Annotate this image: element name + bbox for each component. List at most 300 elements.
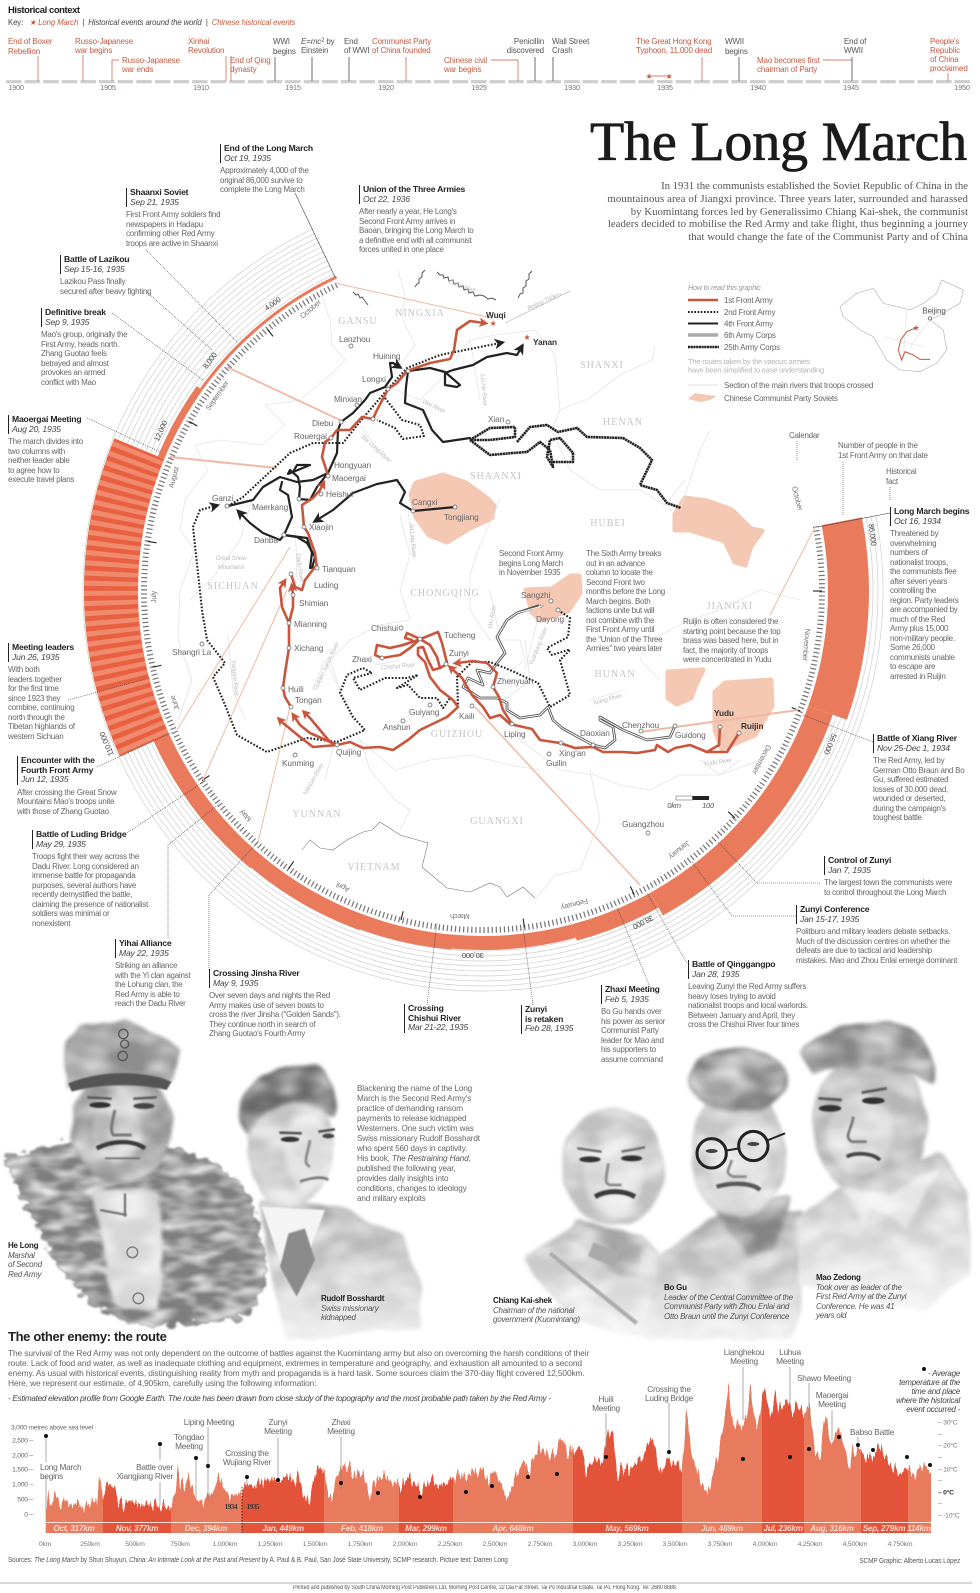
event: maoergai meeting: The march divides into	[8, 437, 83, 446]
event: crossing chishui river: Crossing	[408, 1003, 444, 1013]
city labels: Danba	[254, 535, 278, 545]
portrait: bo gu	[643, 1048, 803, 1338]
province labels: YUNNAN	[292, 809, 342, 820]
elevation chart: axes: 0 –	[24, 1512, 33, 1518]
event: meeting leaders: combine, continuing	[8, 703, 74, 712]
city labels: Heishui	[326, 489, 353, 499]
city labels: Tongan	[295, 695, 322, 705]
ring value labels: 12,000	[152, 419, 169, 443]
timeline: historical context ruler: begins	[273, 47, 296, 56]
city labels: Guiyang	[409, 707, 440, 717]
city labels: Yanan	[533, 337, 557, 347]
event: crossing jinsha river	[209, 968, 341, 1038]
event: battle of luding bridge: soldiers was minimal or	[32, 909, 109, 918]
elevation chart: event markers: Luding Bridge	[645, 1393, 694, 1403]
caption: he long: He Long	[8, 1241, 38, 1250]
elevation chart: axes: 2,000km	[393, 1541, 418, 1548]
event: end of the long march: complete the Long March	[220, 185, 305, 194]
city labels: Kaili	[459, 711, 474, 721]
event: battle of luding bridge: nonexistent	[32, 918, 70, 928]
timeline: historical context ruler: Republic	[930, 46, 960, 55]
event: long march begins: non-military people.	[890, 634, 955, 642]
elevation chart: axes: 3,000 metres above sea level	[11, 1424, 94, 1432]
portrait: rudolf bosshardt	[240, 1066, 420, 1340]
event: meeting leaders: leaders together	[8, 674, 62, 684]
elevation chart: axes: 1,500 –	[12, 1466, 33, 1474]
ring value labels: 110,000	[98, 731, 116, 757]
calendar day ticks: October	[298, 297, 323, 320]
ring chart: people in first front army	[84, 276, 869, 950]
caption: rudolf bosshardt: Swiss missionary	[321, 1304, 378, 1312]
event: shaanxi soviet	[126, 187, 220, 248]
elevation chart: event markers: Xiangjiang River	[117, 1471, 173, 1481]
event: encounter with the fourth front army	[17, 755, 117, 816]
event: control of zunyi: Jan 7, 1935	[828, 864, 871, 874]
river and mountain labels: Dadu River	[294, 553, 305, 584]
note: sixth army: First Front Army until	[586, 625, 654, 634]
timeline: historical context ruler: People's	[930, 37, 959, 46]
connector lines: events to ring	[68, 193, 890, 1005]
elevation chart: monthly areas: Apr, 648km	[491, 1524, 534, 1533]
province labels: HUBEI	[590, 518, 626, 529]
elevation chart: event markers: Battle over	[136, 1462, 173, 1472]
elevation chart: monthly areas: Sep, 279km	[863, 1524, 905, 1533]
calendar day ticks: August	[166, 466, 181, 489]
timeline: historical context ruler: proclaimed	[930, 64, 968, 73]
event: definitive break: Zhang Guotao feels	[41, 349, 107, 358]
timeline: historical context ruler: of China	[930, 55, 959, 64]
text: the other enemy intro: The survival of the Red Army was not only dependent on the outcome of battles against the Kuomintang army but also on overcoming the harsh conditions of their	[8, 1348, 589, 1358]
elevation chart: monthly areas: Jul, 236km	[763, 1524, 803, 1533]
city labels: Guidong	[675, 730, 706, 740]
timeline: historical context ruler: 1915	[285, 83, 301, 92]
event: battle of qinggangpo: Leaving Zunyi the Red Army suffers	[688, 982, 806, 991]
caption: mao zedong: Mao Zedong	[816, 1273, 861, 1282]
elevation chart: monthly areas: 114km	[907, 1524, 931, 1533]
event: battle of luding bridge: Dadu River. Long considered an	[32, 862, 139, 870]
event: long march begins: Oct 16, 1934	[894, 516, 941, 526]
city labels: Maoergai	[332, 473, 366, 483]
note: sixth army: The Sixth Army breaks	[586, 549, 661, 558]
city labels: Guilin	[546, 758, 567, 768]
timeline: historical context ruler: Wall Street	[552, 37, 590, 46]
event: encounter with the fourth front army: Encounter with the	[21, 755, 95, 765]
note: historical fact: fact	[886, 476, 898, 486]
city labels: Sangzhi	[521, 590, 551, 600]
city labels: Chenzhou	[622, 720, 660, 730]
elevation chart: axes: 750km	[170, 1541, 190, 1548]
timeline: historical context ruler: war ends	[121, 65, 153, 74]
elevation chart: monthly areas: Nov, 377km	[116, 1524, 158, 1533]
event: control of zunyi: Control of Zunyi	[828, 855, 891, 865]
elevation chart: event markers: event occurred -	[906, 1405, 961, 1414]
event: zunyi conference: Zunyi Conference	[800, 904, 869, 914]
intro text: leaders decided to mobilise the Red Army and take flight, thus beginning a journey	[608, 218, 968, 230]
event: battle of qinggangpo: Between January and April, they	[688, 1010, 795, 1020]
event: maoergai meeting	[8, 414, 83, 484]
event: battle of luding bridge: recently demystified the battle,	[32, 890, 132, 899]
ring value labels: 8,000	[201, 351, 219, 370]
event: crossing chishui river: Mar 21-22, 1935	[408, 1022, 468, 1032]
note: sixth army: Armies” two years later	[586, 644, 662, 653]
legend: how to read this graphic: The routes taken by the various armies	[688, 357, 810, 366]
province labels: JIANGXI	[707, 601, 753, 612]
event: shaanxi soviet: Shaanxi Soviet	[130, 187, 188, 197]
event: definitive break: provokes an armed	[41, 368, 105, 377]
event: battle of lazikou: Lazikou Pass finally	[60, 277, 125, 286]
event: battle of luding bridge: claiming the presence of nationalist	[32, 900, 148, 908]
event: long march begins: nationalist troops,	[890, 558, 948, 566]
elevation chart: event markers: Shawo Meeting	[797, 1373, 852, 1383]
note: sixth army: factions unite but will	[586, 606, 654, 615]
event: battle of luding bridge	[32, 829, 148, 928]
city labels: Kunming	[282, 758, 315, 768]
intro text	[607, 180, 968, 243]
timeline: historical context ruler: Russo-Japanese	[122, 56, 181, 65]
province labels: HUNAN	[594, 669, 636, 680]
timeline: historical context ruler: End of	[844, 37, 867, 46]
elevation chart: axes: 4,750km	[888, 1541, 913, 1548]
timeline: historical context ruler: 1900	[8, 83, 24, 92]
timeline: historical context ruler: dynasty	[230, 65, 257, 74]
legend: how to read this graphic: 6th Army Corps	[724, 331, 776, 340]
river and mountain labels: Xiang River	[591, 692, 624, 707]
timeline: historical context ruler: chairman of Party	[757, 65, 817, 74]
elevation chart: event markers: Long March	[40, 1462, 82, 1472]
map borders and rivers	[178, 270, 800, 900]
event: battle of qinggangpo: Jan 28, 1935	[692, 968, 739, 978]
intro text: mountainous area of Jiangxi province. Three years later, surrounded and harassed	[607, 193, 968, 205]
event: long march begins: after seven years	[890, 576, 947, 586]
elevation chart: monthly areas: Oct, 317km	[53, 1524, 95, 1533]
river and mountain labels	[216, 279, 733, 796]
event: long march begins: are accompanied by	[890, 605, 958, 614]
event: zhaxi meeting: Feb 5, 1935	[605, 994, 649, 1004]
elevation chart: event markers: Wujiang River	[223, 1457, 272, 1467]
event: encounter with the fourth front army: with those of Zhang Guotao	[17, 806, 109, 816]
note: ruijin: Ruijin is often considered the	[683, 617, 778, 626]
event: crossing jinsha river: cross the river Jinsha ("Golden Sands").	[209, 1010, 341, 1019]
elevation chart: event markers: time and place	[911, 1387, 961, 1396]
caption: mao zedong	[816, 1273, 907, 1320]
city labels: Zunyi	[449, 648, 469, 658]
legend: how to read this graphic: How to read this graphic	[688, 283, 761, 292]
elevation chart: event markers: Crossing the	[647, 1384, 691, 1394]
elevation chart: monthly areas: May, 569km	[605, 1524, 649, 1533]
event: maoergai meeting: to agree how to	[8, 466, 59, 474]
event: crossing jinsha river: May 9, 1935	[213, 978, 258, 988]
event: zhaxi meeting: leader for Mao and	[601, 1036, 664, 1044]
timeline: historical context ruler: WWII	[725, 37, 744, 46]
city labels: Zhaxi	[352, 654, 372, 664]
elevation chart: axes: 2,500 –	[12, 1438, 33, 1444]
text: blackening the name: payments to release kidnapped	[357, 1114, 466, 1123]
caption: bo gu: Bo Gu	[664, 1283, 687, 1292]
text: the other enemy intro: Here, we represent our estimate, of 4,905km, carefully using the following information:	[8, 1378, 316, 1388]
event: meeting leaders: Tibetan highlands of	[8, 722, 75, 731]
province labels: GUIZHOU	[431, 729, 483, 740]
event: shaanxi soviet: confirming other Red Army	[126, 229, 214, 238]
city labels: ★	[490, 319, 497, 328]
city labels: Wuqi	[486, 310, 506, 320]
river and mountain labels: Great Wall	[448, 279, 476, 295]
ring value labels	[98, 295, 878, 960]
text: blackening the name: who spent 560 days in captivity.	[357, 1144, 467, 1153]
event: battle of lazikou: secured after heavy fighting	[60, 286, 151, 296]
elevation chart: axes: 2,250km	[438, 1541, 463, 1548]
city labels: Ganzi	[212, 493, 233, 503]
elevation chart: axes: –	[938, 1477, 942, 1484]
timeline: historical context ruler: 1935	[657, 83, 673, 92]
event: meeting leaders: north through the	[8, 712, 65, 722]
city labels: Xiaojin	[309, 522, 334, 532]
province labels: SHANXI	[580, 360, 624, 371]
city labels: Diebu	[312, 418, 334, 428]
route: 4th front army	[228, 348, 521, 568]
city labels: Cangxi	[412, 497, 437, 507]
timeline: historical context ruler: of China founded	[372, 46, 431, 55]
event: control of zunyi: The largest town the communists were	[824, 878, 952, 887]
river and mountain labels: Jia Ling River	[407, 521, 418, 559]
city labels: Chishui	[371, 623, 398, 633]
elevation chart: axes: 1,000 –	[12, 1482, 33, 1488]
event: battle of lazikou: Battle of Lazikou	[64, 254, 129, 264]
city labels: Hongyuan	[334, 460, 372, 470]
concentric people-scale rings	[83, 191, 883, 991]
event: meeting leaders: Meeting leaders	[12, 642, 74, 652]
event: long march begins: numbers of	[890, 548, 928, 557]
event: battle of xiang river: German Otto Braun and Bo	[873, 766, 964, 774]
elevation chart: event markers: begins	[40, 1471, 63, 1481]
elevation chart: event markers: Luhua	[779, 1347, 802, 1357]
river and mountain labels: Chishui River	[381, 661, 416, 671]
event: definitive break: Mao's group, originally the	[41, 330, 127, 339]
caption: mao zedong: First Red Army at the Zunyi	[816, 1292, 906, 1301]
text: blackening the name: His book, The Restraining Hand,	[357, 1154, 471, 1163]
elevation chart: event markers: Tongdao	[174, 1432, 205, 1442]
note: sixth army	[586, 549, 665, 653]
elevation chart: event markers: Meeting	[264, 1426, 293, 1436]
event: zunyi is retaken	[521, 1004, 574, 1034]
event: union of the three armies: Union of the Three Armies	[363, 184, 465, 194]
note: sixth army: the “Union of the Three	[586, 634, 662, 644]
event: battle of luding bridge: immense battle for propaganda	[32, 871, 135, 880]
city labels: Shangri La	[172, 647, 212, 657]
timeline: historical context ruler: ★	[646, 72, 653, 81]
note: ruijin: fact, the majority of troops	[683, 646, 768, 654]
timeline: historical context ruler: Penicillin	[514, 37, 544, 46]
elevation chart: axes: 1,000km	[213, 1541, 238, 1548]
intro text: that would change the fate of the Communist Party and of China	[688, 231, 968, 243]
city labels	[172, 310, 763, 829]
caption: bo gu	[664, 1283, 793, 1320]
event: zhaxi meeting: Bo Gu hands over	[601, 1007, 661, 1016]
city labels: Huili	[288, 684, 304, 694]
timeline: historical context ruler: 1920	[378, 83, 394, 92]
elevation chart: event markers: - Average	[928, 1369, 961, 1378]
elevation chart: axes: 250km	[80, 1541, 100, 1548]
elevation chart: axes: 3,750km	[708, 1541, 733, 1548]
note: sixth army: column to locate the	[586, 568, 653, 577]
timeline: historical context ruler: 1930	[564, 83, 580, 92]
city labels: Lanzhou	[339, 334, 371, 344]
locator map: china: ★	[912, 324, 920, 333]
portrait: he long	[5, 1022, 264, 1327]
note: historical fact: Historical	[886, 467, 916, 476]
note: number of people	[838, 441, 928, 460]
note: calendar: Calendar	[789, 431, 819, 440]
print line: Printed and published by South China Morning Post Publishers Ltd, Morning Post Centre, 22 Dai Fat Street, Tai Po Industrial Estate, Tai Po, Hong Kong. Tel: 2680 8888.	[293, 1585, 677, 1591]
event: zunyi is retaken: Feb 28, 1935	[525, 1023, 573, 1033]
note: ruijin: were concentrated in Yudu	[683, 655, 771, 664]
city labels: Mianning	[294, 619, 327, 629]
province labels: SICHUAN	[207, 581, 259, 592]
locator map: china	[840, 280, 963, 372]
elevation chart: event markers: Meeting	[776, 1356, 805, 1366]
event: yihai alliance: May 22, 1935	[119, 948, 169, 958]
elevation chart: event markers: Zhaxi	[331, 1417, 351, 1427]
elevation chart: axes: 4,000km	[753, 1541, 778, 1548]
caption: chiang kai-shek: Chiang Kai-shek	[493, 1296, 552, 1305]
note: sixth army: March begins. Both	[586, 596, 650, 606]
event: yihai alliance: with the Yi clan against	[115, 970, 190, 980]
city labels: Shimian	[299, 598, 329, 608]
timeline: historical context ruler: war begins	[443, 65, 481, 74]
locator map: china: Beijing	[922, 306, 946, 315]
city labels: Zhenyuan	[497, 676, 534, 686]
event: definitive break: Definitive break	[45, 307, 106, 317]
note: ruijin: brass was based here, but in	[683, 636, 778, 645]
timeline key: Key: ★ Long March | Historical events around the world | Chinese historical events	[8, 18, 295, 27]
text: blackening the name: practice of demanding ransom	[357, 1104, 463, 1113]
timeline: historical context ruler: 1905	[100, 83, 116, 92]
city labels: Maerkang	[252, 502, 289, 512]
timeline: historical context ruler: ★	[666, 72, 673, 81]
intro text: by Kuomintang forces led by Generalissimo Chiang Kai-shek, the communist	[631, 206, 968, 218]
timeline: historical context ruler	[6, 37, 970, 92]
event: yihai alliance: Yihai Alliance	[119, 938, 171, 948]
timeline: historical context ruler: WWI	[273, 37, 290, 46]
province labels: NINGXIA	[395, 308, 445, 319]
caption: bo gu: Otto Braun until the Zunyi Conference	[664, 1312, 789, 1320]
event: zunyi conference	[796, 904, 958, 964]
event: long march begins: much of the Red	[890, 614, 945, 624]
event: crossing jinsha river: Crossing Jinsha River	[213, 968, 300, 978]
note: sixth army: Second Front two	[586, 578, 645, 586]
elevation chart: event markers: Zunyi	[268, 1417, 288, 1427]
elevation chart: axes: 2,750km	[528, 1541, 553, 1548]
timeline: historical context ruler: Xinhai	[188, 37, 210, 46]
elevation chart: event markers: Liping Meeting	[184, 1417, 235, 1427]
event: zunyi conference: Much of the discussion centres on whether the	[796, 936, 950, 946]
event: control of zunyi: to control throughout the Long March	[824, 888, 946, 896]
city labels: Ruijin	[741, 721, 763, 731]
note: number of people: Number of people in the	[838, 441, 918, 450]
event: long march begins: Some 26,000	[890, 643, 935, 652]
timeline: historical context ruler: WWII	[844, 46, 863, 55]
caption: he long: Red Army	[8, 1270, 41, 1278]
caption: chiang kai-shek: Chairman of the national	[493, 1306, 574, 1314]
event: battle of qinggangpo: heavy loses trying to avoid	[688, 992, 776, 1000]
elevation chart: axes: 1,250km	[258, 1541, 283, 1548]
timeline: historical context ruler: of WWI	[344, 46, 369, 55]
caption: bo gu: Leader of the Central Committee of the	[664, 1292, 793, 1302]
city labels: Longxi	[362, 374, 386, 384]
towns on the map	[200, 344, 741, 835]
event: battle of qinggangpo: nationalist troops and local warlords.	[688, 1001, 808, 1010]
event: union of the three armies: a definitive end with all communist	[359, 236, 472, 244]
timeline: historical context ruler: Revolution	[188, 46, 224, 55]
text: blackening the name: conditions, changes to ideology	[357, 1184, 467, 1193]
event: battle of xiang river	[873, 733, 964, 822]
calendar day ticks: March	[450, 912, 470, 921]
note: second front army: Second Front Army	[499, 549, 563, 558]
timeline: historical context ruler: 1950	[954, 83, 970, 92]
event: shaanxi soviet: Sep 21, 1935	[130, 196, 179, 206]
event: battle of qinggangpo: cross the Chishui River four times	[688, 1020, 799, 1029]
event: encounter with the fourth front army: Fourth Front Army	[21, 764, 93, 774]
title: The Long March	[590, 111, 967, 172]
scale bar: 100	[702, 801, 715, 810]
elevation chart: monthly areas: Feb, 418km	[341, 1524, 383, 1533]
elevation chart: event markers: Meeting	[327, 1426, 356, 1436]
event: zhaxi meeting: Zhaxi Meeting	[605, 984, 660, 994]
river and mountain labels: Beijing 790km	[526, 291, 562, 312]
soviet areas on the map	[411, 475, 772, 749]
sources: Sources: The Long March by Shun Shuyun, China: An Intimate Look at the Past and Present by A. Paul & B. Paul, San José State University, SCMP research. Picture text: Darren Long	[8, 1555, 508, 1564]
city labels: ★	[524, 333, 531, 342]
elevation chart: event markers: Meeting	[592, 1403, 621, 1413]
route: 2nd front army	[193, 343, 570, 752]
river and mountain labels: Yangtze River	[229, 660, 240, 697]
event: meeting leaders: since 1923 they	[8, 694, 60, 702]
elevation chart: event markers: where the historical	[896, 1396, 960, 1405]
event: definitive break: Sep 9, 1935	[45, 316, 89, 326]
event: maoergai meeting: execute travel plans	[8, 475, 74, 484]
timeline: historical context ruler: Typhoon, 11,000 dead	[636, 46, 712, 55]
event: zhaxi meeting: Communist Party	[601, 1026, 659, 1035]
timeline: historical context ruler: 1945	[843, 83, 859, 92]
route: 25th army corps	[470, 425, 681, 508]
event: zhaxi meeting	[601, 984, 666, 1064]
calendar day ticks: October	[790, 485, 805, 512]
event: battle of qinggangpo	[688, 959, 808, 1029]
city labels: Tongjiang	[444, 512, 479, 522]
elevation chart: axes: 4,250km	[798, 1541, 823, 1548]
event: shaanxi soviet: First Front Army soldiers find	[126, 210, 220, 219]
event: zhaxi meeting: his supporters to	[601, 1045, 656, 1054]
text: blackening the name: Westerners. One such victim was	[357, 1124, 474, 1133]
text: elevation note: - Estimated elevation profile from Google Earth. The route has been drawn from close study of the topography and the most probable path taken by the Red Army -	[8, 1394, 551, 1403]
event: union of the three armies: forces united in one place	[359, 245, 444, 254]
river and mountain labels: Liu He River	[479, 374, 488, 407]
calendar day ticks	[141, 281, 825, 933]
river and mountain labels: Nanpan River	[302, 761, 326, 796]
event: battle of qinggangpo: Battle of Qinggangpo	[692, 959, 775, 969]
event: shaanxi soviet: newspapers in Hadapu	[126, 220, 203, 228]
timeline: historical context ruler: End of Qing	[230, 56, 271, 65]
calendar day ticks: June	[168, 694, 181, 711]
event: battle of lazikou: Sep 15-16, 1935	[64, 264, 125, 274]
elevation chart: axes: 500 –	[17, 1496, 33, 1504]
elevation chart: axes	[11, 1418, 960, 1548]
city labels: Guangzhou	[622, 819, 664, 829]
scale bar	[667, 796, 715, 810]
elevation chart: event markers: temperature at the	[899, 1378, 961, 1387]
event: long march begins: controlling the	[890, 586, 936, 595]
event: yihai alliance: reach the Dadu River	[115, 999, 186, 1008]
event: union of the three armies: Oct 22, 1936	[363, 194, 410, 204]
